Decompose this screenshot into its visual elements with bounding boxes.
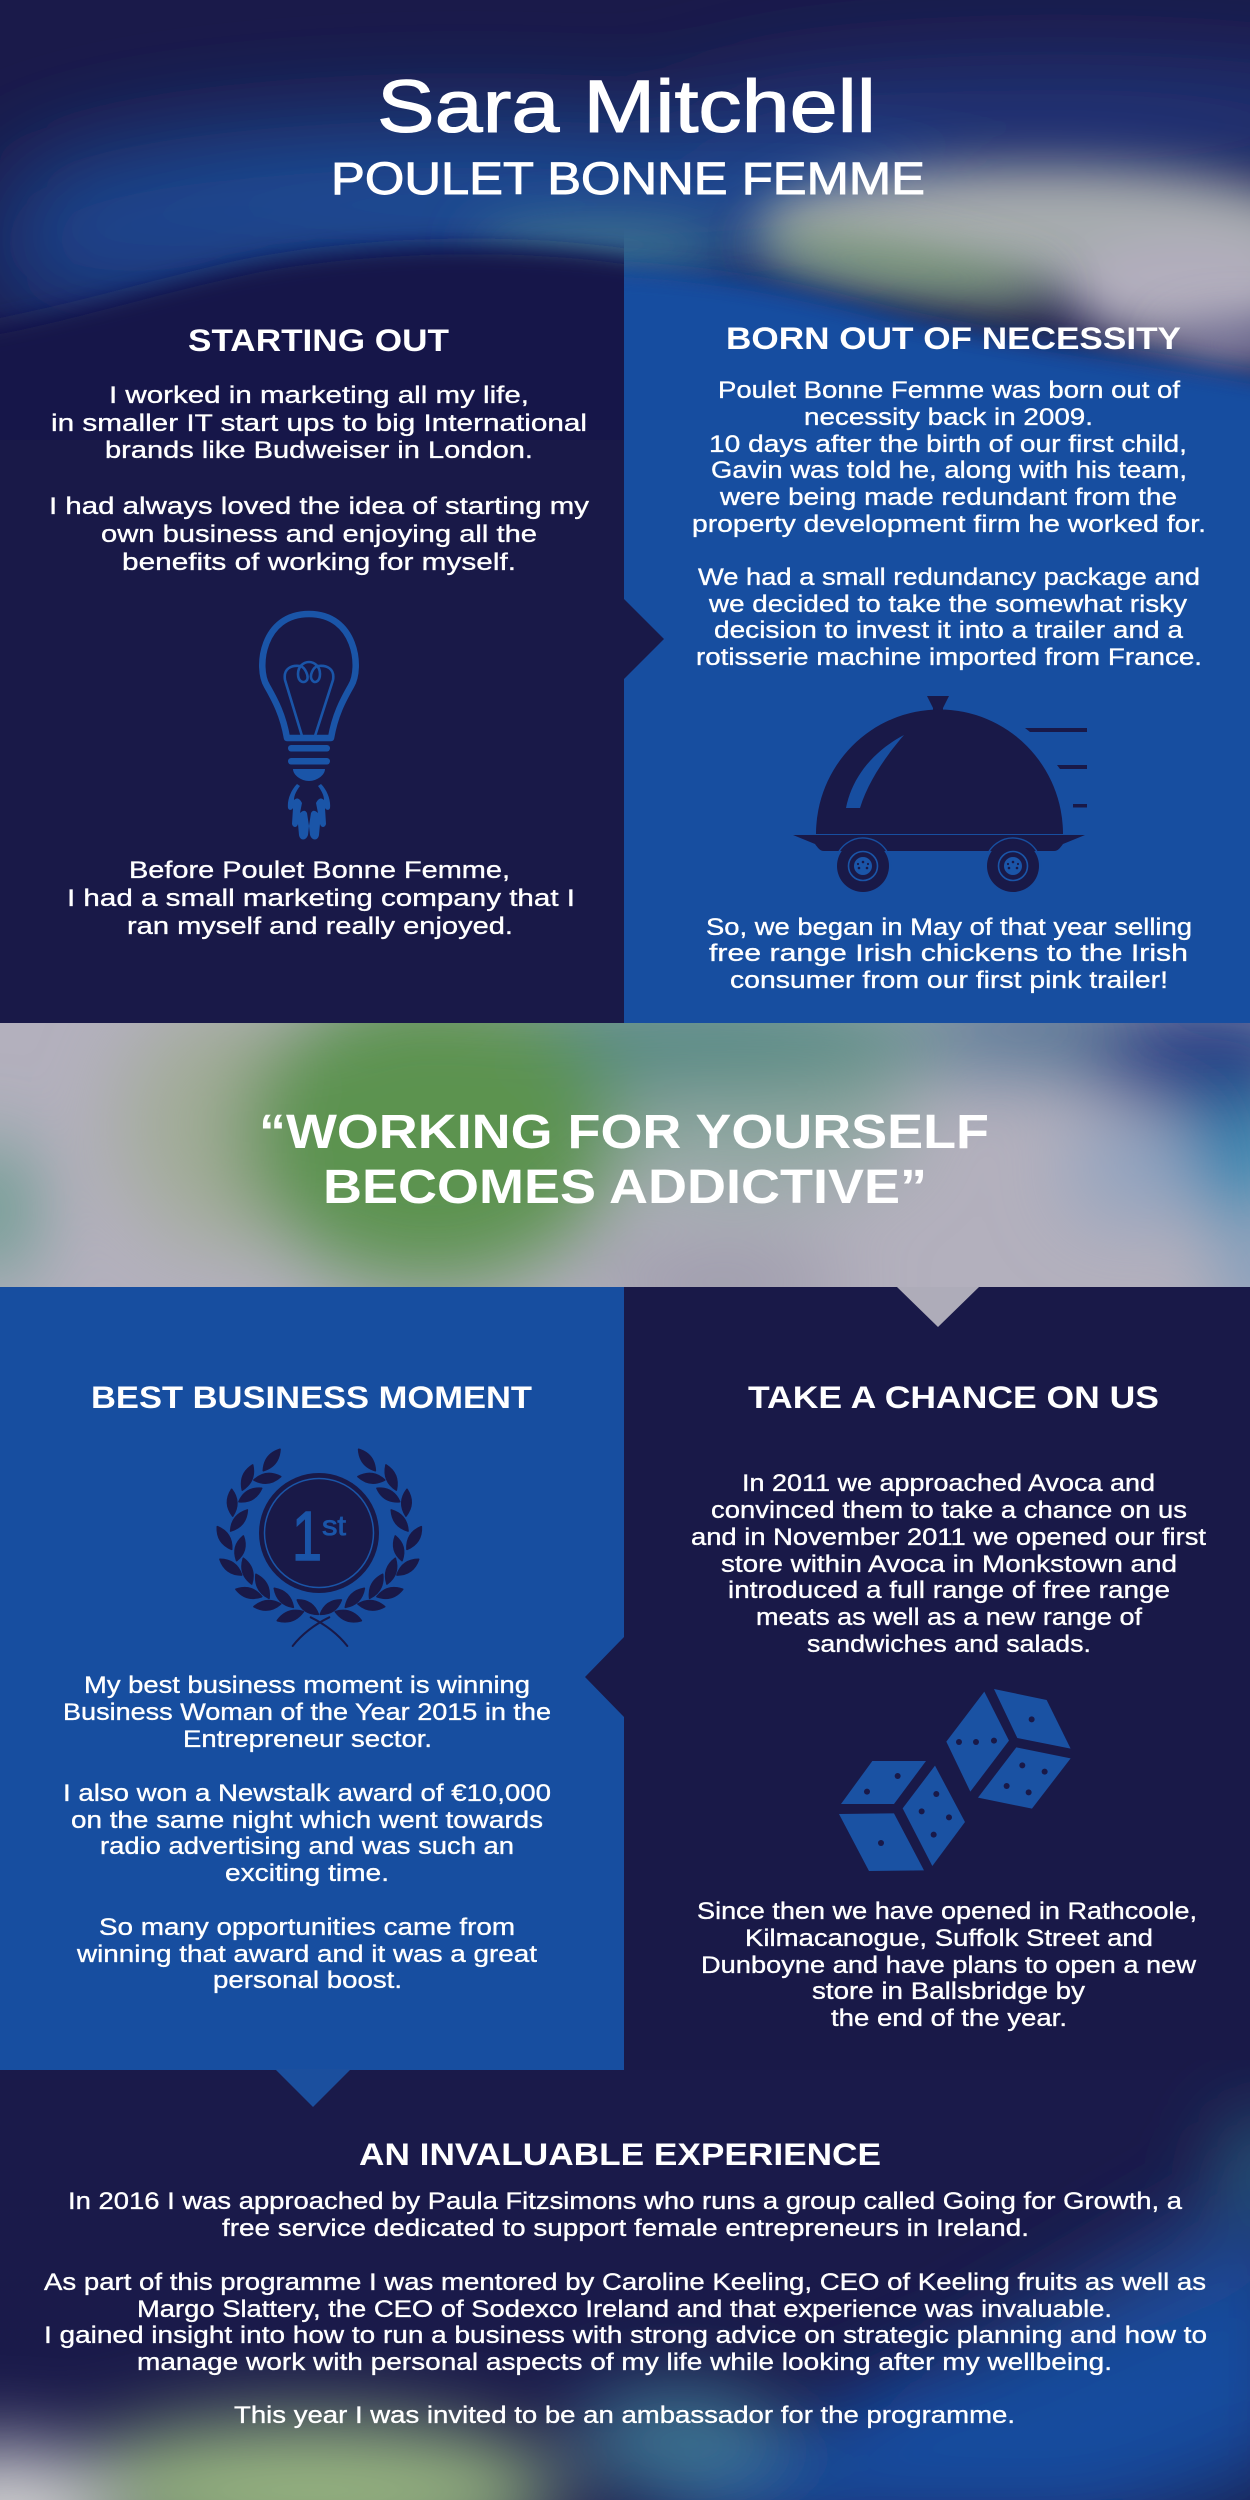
title: Sara Mitchell xyxy=(377,65,876,148)
arrow: blue pointer into footer repeated on top xyxy=(275,2069,351,2107)
icon: first place laurel wreath: 1 xyxy=(292,1497,322,1575)
text block: starting out intro: in smaller IT start ups to big International xyxy=(51,410,587,437)
text block: best business moment: radio advertising and was such an xyxy=(100,1833,514,1860)
heading: best business moment: BEST BUSINESS MOMENT xyxy=(91,1379,532,1415)
text block: first pink trailer: consumer from our first pink trailer! xyxy=(730,967,1168,994)
text block: since then: Since then we have opened in Rathcoole, xyxy=(697,1898,1197,1925)
text block: born out of necessity: 10 days after the birth of our first child, xyxy=(709,431,1187,458)
text block: going for growth: free service dedicated to support female entrepreneurs in Ireland. xyxy=(222,2215,1029,2242)
text block: take a chance on us: In 2011 we approached Avoca and xyxy=(742,1470,1155,1497)
text block: best business moment: winning that award and it was a great xyxy=(76,1941,537,1968)
text block: before poulet bonne femme: Before Poulet Bonne Femme, xyxy=(129,857,510,884)
heading: starting out: STARTING OUT xyxy=(188,322,449,358)
text block: born out of necessity: we decided to take the somewhat risky xyxy=(708,591,1188,618)
heading: an invaluable experience: AN INVALUABLE EXPERIENCE xyxy=(359,2136,881,2172)
text block: born out of necessity: We had a small redundancy package and xyxy=(698,564,1200,591)
background: top aurora header xyxy=(0,14,1250,370)
panel: quote band xyxy=(0,1023,1250,1287)
text block: first pink trailer xyxy=(706,914,1192,994)
text block: born out of necessity: property development firm he worked for. xyxy=(692,511,1206,538)
panel: starting out background xyxy=(0,232,664,679)
text block: since then: the end of the year. xyxy=(831,2005,1067,2032)
text block: take a chance on us xyxy=(691,1470,1206,1658)
text block: best business moment: Business Woman of the Year 2015 in the xyxy=(63,1699,551,1726)
text block: best business moment: personal boost. xyxy=(213,1967,402,1994)
text block: before poulet bonne femme: I had a small marketing company that I xyxy=(67,885,575,912)
text block: best business moment xyxy=(63,1672,551,1994)
text block: going for growth: This year I was invited to be an ambassador for the programme. xyxy=(234,2402,1015,2429)
arrow: navy pointer into blue panel xyxy=(585,1637,624,1717)
text block: take a chance on us: and in November 2011 we opened our first xyxy=(691,1524,1206,1551)
text block: first pink trailer: free range Irish chickens to the Irish xyxy=(709,940,1188,967)
quote heading xyxy=(259,1106,989,1214)
heading: born out of necessity: BORN OUT OF NECESSITY xyxy=(726,320,1181,356)
text block: since then: Kilmacanogue, Suffolk Street and xyxy=(745,1925,1153,1952)
text block: born out of necessity: necessity back in 2009. xyxy=(804,404,1093,431)
text block: best business moment: I also won a Newstalk award of €10,000 xyxy=(63,1780,551,1807)
text block: going for growth xyxy=(44,2188,1207,2429)
text block: starting out intro: benefits of working for myself. xyxy=(122,549,516,576)
text block: starting out intro: brands like Budweiser in London. xyxy=(105,437,533,464)
panel: lower left blue xyxy=(0,1287,624,2107)
text block: best business moment: on the same night which went towards xyxy=(71,1807,543,1834)
subtitle: POULET BONNE FEMME xyxy=(331,153,925,204)
icon: dice xyxy=(839,1689,1071,1871)
text block: starting out intro: I worked in marketing all my life, xyxy=(109,382,529,409)
panel: footer aurora background xyxy=(0,2070,1250,2500)
text block: take a chance on us: sandwiches and salads. xyxy=(807,1631,1091,1658)
text block: going for growth: In 2016 I was approached by Paula Fitzsimons who runs a group called Going for Growth, a xyxy=(68,2188,1182,2215)
text block: born out of necessity: decision to invest it into a trailer and a xyxy=(714,617,1183,644)
heading: take a chance on us: TAKE A CHANCE ON US xyxy=(748,1379,1159,1415)
panel: lower right navy xyxy=(585,1287,1250,2070)
text block: starting out intro: I had always loved the idea of starting my xyxy=(49,493,590,520)
text block: best business moment: Entrepreneur sector. xyxy=(183,1726,432,1753)
text block: going for growth: manage work with personal aspects of my life while looking after my wellbeing. xyxy=(137,2349,1112,2376)
text block: born out of necessity: Poulet Bonne Femme was born out of xyxy=(718,377,1180,404)
text block: take a chance on us: meats as well as a new range of xyxy=(756,1604,1142,1631)
text block: best business moment: My best business moment is winning xyxy=(84,1672,530,1699)
quote heading: BECOMES ADDICTIVE” xyxy=(323,1161,927,1214)
text block: going for growth: I gained insight into how to run a business with strong advice on strategic planning and how to xyxy=(44,2322,1207,2349)
text block: going for growth: Margo Slattery, the CEO of Sodexco Ireland and that experience was invaluable. xyxy=(137,2296,1112,2323)
text block: take a chance on us: introduced a full range of free range xyxy=(728,1577,1170,1604)
text block: born out of necessity xyxy=(692,377,1206,671)
text block: best business moment: exciting time. xyxy=(225,1860,389,1887)
icon: first place laurel wreath xyxy=(217,1449,421,1646)
text block: born out of necessity: rotisserie machine imported from France. xyxy=(696,644,1202,671)
text block: starting out intro: own business and enjoying all the xyxy=(101,521,537,548)
panel: born out of necessity background xyxy=(600,224,1250,1063)
arrow: navy pointer into blue panel xyxy=(624,599,664,679)
arrow: blue pointer down into quote band xyxy=(897,1023,979,1063)
icon: light bulb rocket xyxy=(262,614,356,840)
text block: born out of necessity: were being made redundant from the xyxy=(719,484,1177,511)
text block: since then: Dunboyne and have plans to open a new xyxy=(701,1952,1196,1979)
icon: first place laurel wreath: st xyxy=(322,1510,346,1541)
arrow: blue pointer down into footer xyxy=(275,2070,351,2107)
text block: born out of necessity: Gavin was told he, along with his team, xyxy=(711,457,1187,484)
text block: take a chance on us: store within Avoca in Monkstown and xyxy=(721,1551,1177,1578)
text block: best business moment: So many opportunities came from xyxy=(99,1914,515,1941)
text block: take a chance on us: convinced them to take a chance on us xyxy=(711,1497,1187,1524)
text block: going for growth: As part of this programme I was mentored by Caroline Keeling, CEO of Keeling fruits as well as xyxy=(44,2269,1206,2296)
text block: since then: store in Ballsbridge by xyxy=(812,1978,1086,2005)
text block: first pink trailer: So, we began in May of that year selling xyxy=(706,914,1192,941)
icon: cloche on wheels xyxy=(793,696,1087,898)
title xyxy=(331,65,925,204)
text block: before poulet bonne femme: ran myself and really enjoyed. xyxy=(127,913,513,940)
text block: since then xyxy=(697,1898,1197,2032)
text block: starting out intro xyxy=(49,382,590,576)
text block: before poulet bonne femme xyxy=(67,857,575,940)
arrow: quote band pointer down xyxy=(897,1287,979,1327)
quote heading: “WORKING FOR YOURSELF xyxy=(259,1106,989,1159)
